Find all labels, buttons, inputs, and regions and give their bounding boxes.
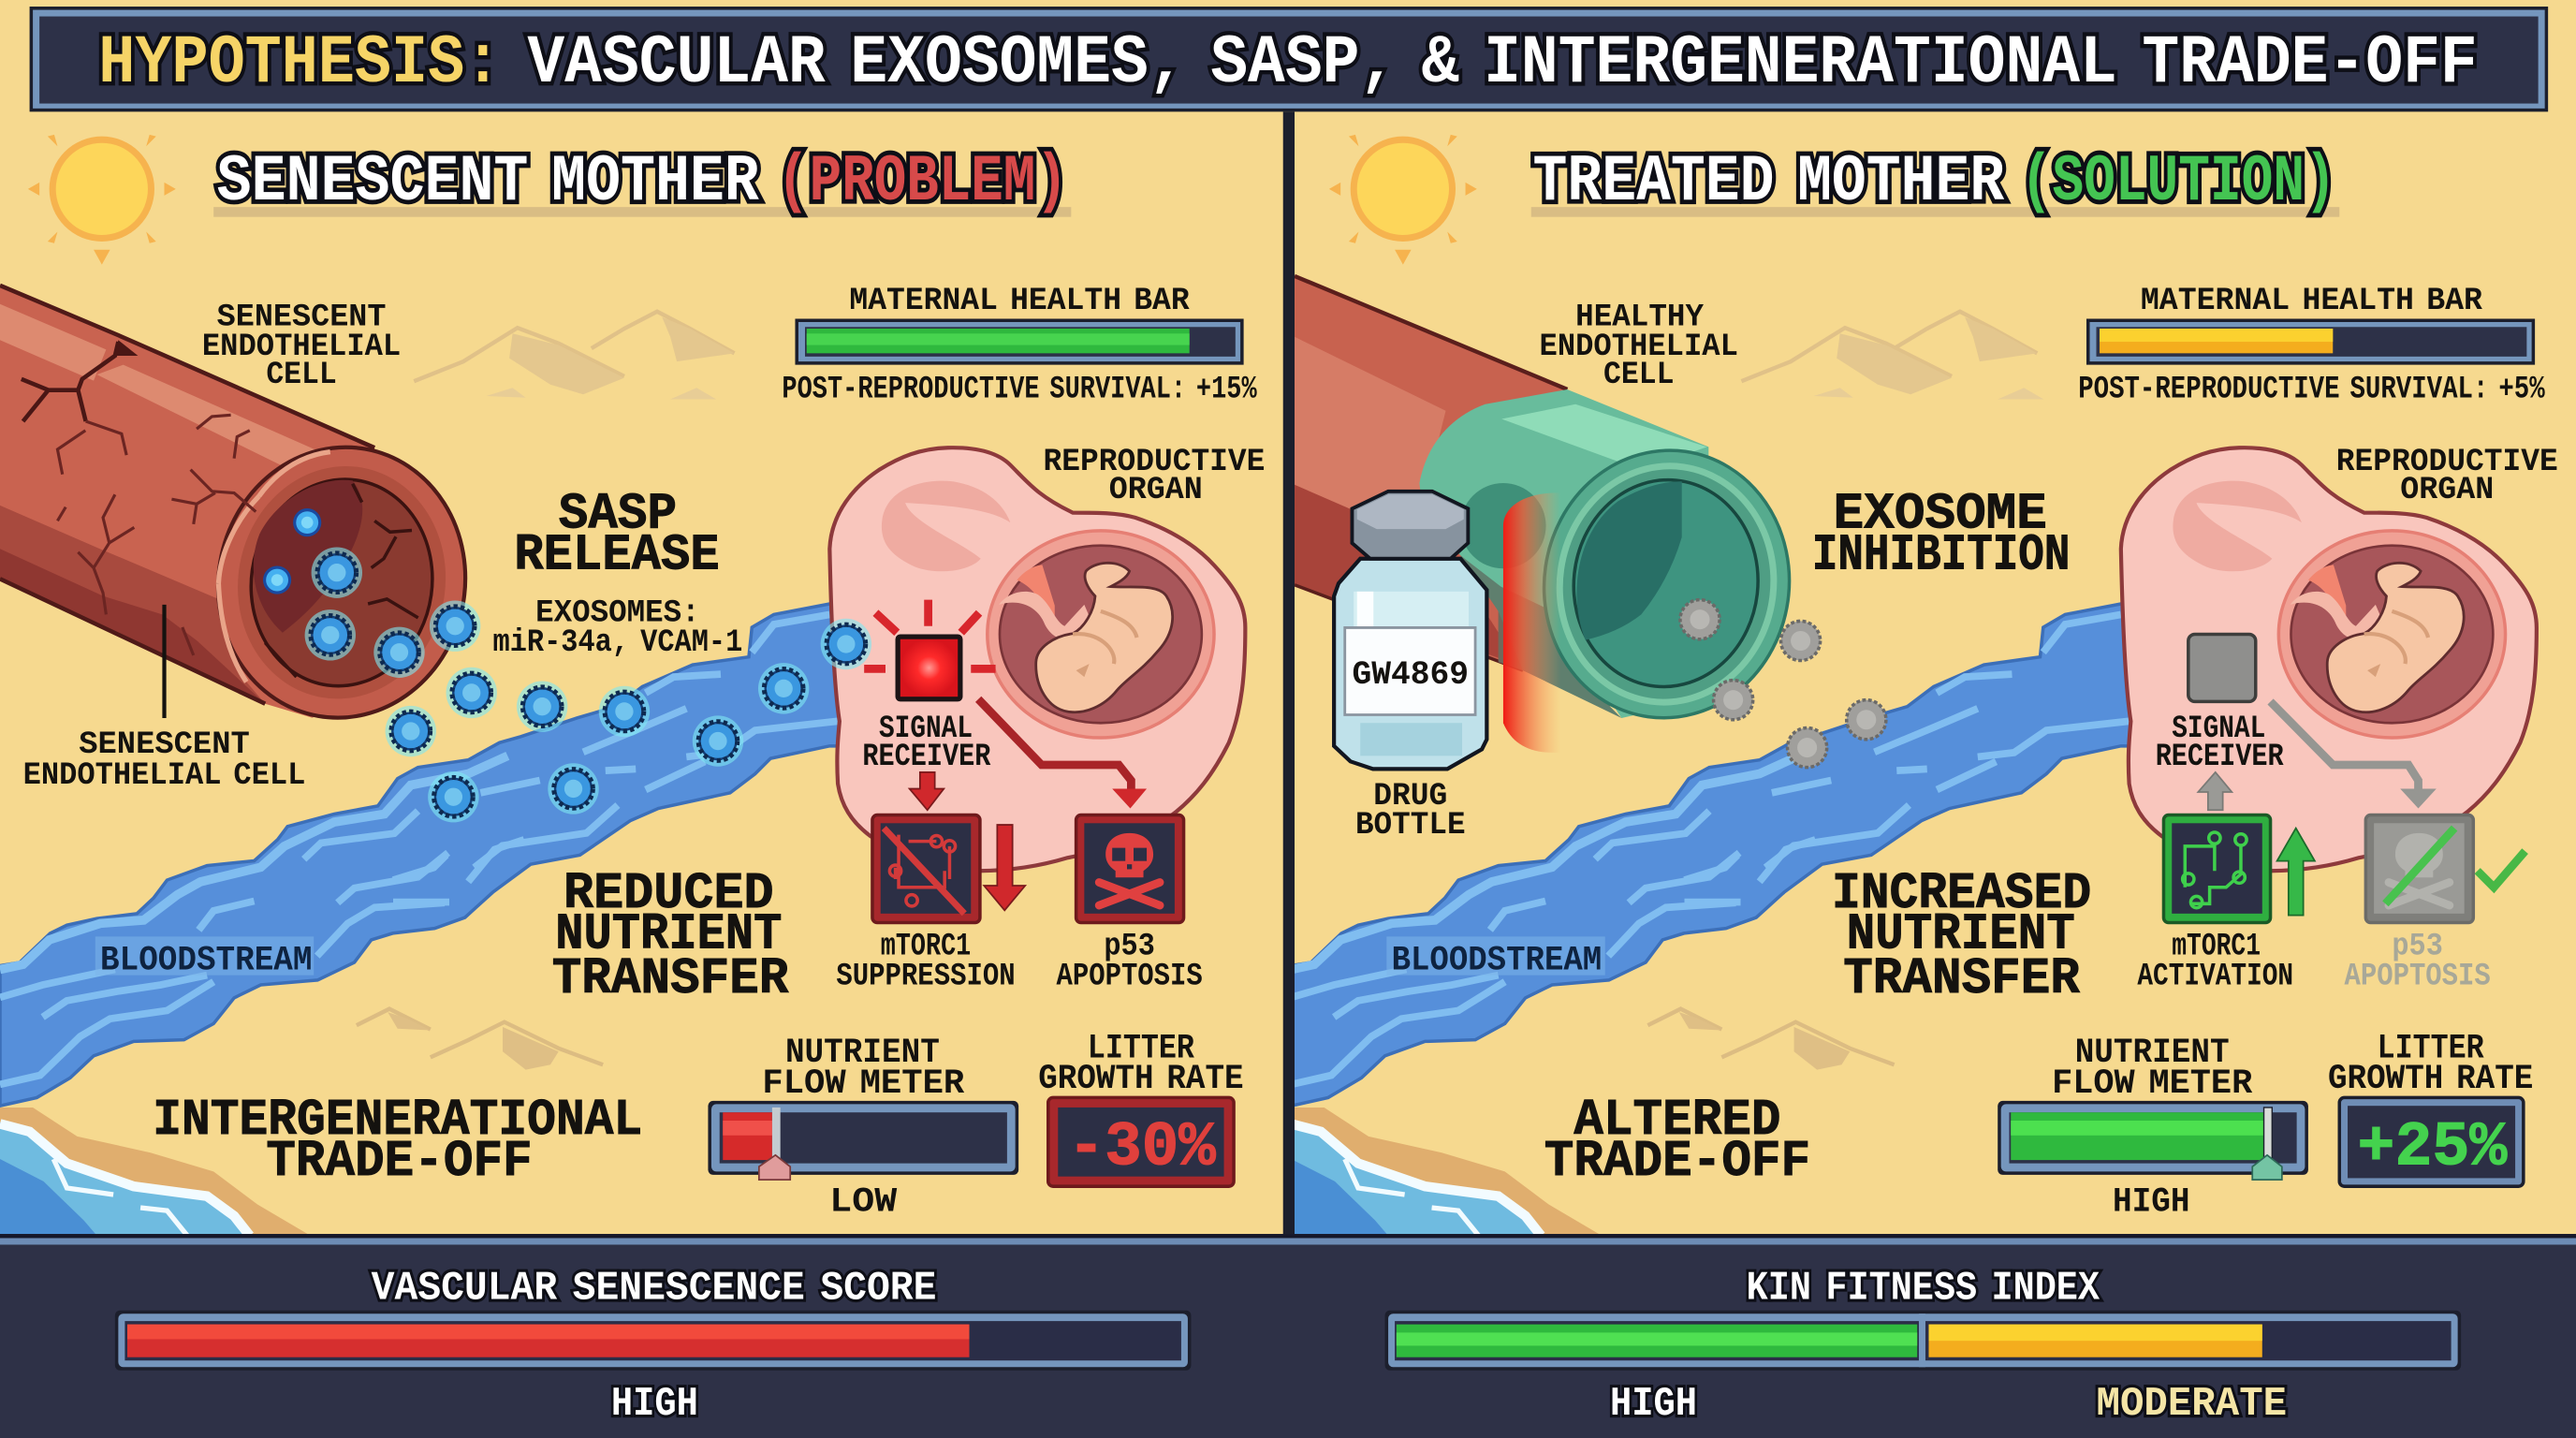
label: increased nutrient transfer: INCREASED [1832, 866, 2091, 923]
label: p53 apoptosis: p53 [1104, 930, 1155, 965]
heading underline shadow [213, 207, 1071, 217]
label: altered trade-off: TRADE-OFF [1544, 1134, 1810, 1191]
label: increased nutrient transfer [1832, 866, 2091, 1008]
label: drug bottle: DRUG [1373, 779, 1447, 814]
label: senescent endothelial cell: ENDOTHELIAL [202, 330, 401, 365]
label: reduced nutrient transfer [552, 873, 790, 993]
label: moderate: MODERATE [2097, 1381, 2287, 1428]
label: maternal health bar: MATERNAL HEALTH BAR [2141, 284, 2482, 319]
heading underline shadow [1531, 207, 2339, 217]
label: low: LOW [829, 1183, 898, 1223]
heading accent: (SOLUTION) [2021, 146, 2336, 220]
senescent blood vessel [0, 286, 487, 738]
label: intergenerational trade-off [155, 1099, 640, 1176]
red inhibition glow [1503, 493, 1560, 753]
label: mTORC1 activation: mTORC1 [2172, 930, 2261, 965]
label: mTORC1 activation: ACTIVATION [2137, 959, 2293, 994]
signal receiver off [2188, 634, 2256, 701]
label: signal receiver: RECEIVER [2156, 740, 2284, 775]
label: high: HIGH [1610, 1381, 1697, 1428]
label: healthy endothelial cell: CELL [1603, 358, 1674, 393]
dune left [1741, 328, 2043, 399]
arrow: gray up [2198, 772, 2232, 810]
reproductive organ [829, 448, 1245, 871]
label: reproductive organ: REPRODUCTIVE [1043, 445, 1265, 480]
heading: SASP release: SASP [559, 486, 677, 543]
label: mTORC1 suppression: mTORC1 [881, 930, 971, 965]
label: lower senescent endothelial cell [24, 731, 304, 785]
label: lower senescent endothelial cell: ENDOTHELIAL CELL [23, 758, 305, 794]
label: senescent endothelial cell: CELL [266, 358, 337, 393]
title banner [30, 7, 2548, 111]
label: maternal health bar: MATERNAL HEALTH BAR [849, 284, 1190, 319]
litter growth value: +25% [2358, 1112, 2508, 1183]
arrow: green up [2277, 829, 2315, 916]
nutrient flow meter [1998, 1101, 2308, 1180]
label: reproductive organ [2336, 445, 2558, 508]
arrow: gray to p53 [2271, 701, 2437, 809]
label: mTORC1 activation [2137, 930, 2293, 994]
leader line [163, 605, 166, 718]
label: litter growth rate: LITTER [1088, 1029, 1195, 1068]
label: nutrient flow meter: FLOW METER [762, 1064, 965, 1104]
label: healthy endothelial cell [1540, 301, 1738, 393]
label: bloodstream: BLOODSTREAM [1392, 942, 1602, 981]
drug label: GW4869 [1352, 656, 1469, 694]
dunes lower [357, 1009, 603, 1070]
heading: exosome inhibition [1812, 486, 2070, 584]
title highlighted word: HYPOTHESIS: [98, 25, 501, 103]
heading: SASP release [517, 492, 718, 569]
label: p53 apoptosis inactive [2345, 930, 2491, 994]
label: nutrient flow meter [765, 1039, 964, 1093]
label: bloodstream: BLOODSTREAM [100, 942, 312, 981]
green treated vessel [1419, 389, 1807, 734]
label: lower senescent endothelial cell: SENESCENT [79, 727, 250, 763]
label: reproductive organ [1045, 448, 1264, 498]
signal receiver icon [864, 600, 996, 701]
dune right [592, 312, 735, 361]
label: exosomes [494, 599, 741, 656]
arrow to p53 [978, 699, 1147, 809]
exosome at organ [821, 619, 871, 669]
maternal health bar [795, 318, 1244, 365]
label: reduced nutrient transfer: TRANSFER [552, 951, 789, 1008]
label: p53 apoptosis inactive: p53 [2392, 930, 2443, 965]
label: altered trade-off [1544, 1093, 1810, 1191]
panel: senescent mother (problem) [0, 135, 1265, 1236]
icon: p53 skull [1076, 815, 1184, 922]
label: drug bottle: BOTTLE [1355, 808, 1466, 844]
label: signal receiver: RECEIVER [862, 740, 991, 775]
label: litter growth rate [2328, 1029, 2533, 1099]
heading: exosome inhibition: INHIBITION [1812, 527, 2070, 584]
river: bloodstream [0, 604, 862, 1106]
label: intergenerational trade-off: INTERGENERATIONAL [153, 1093, 642, 1150]
sun icon [28, 135, 176, 265]
label: senescent endothelial cell: SENESCENT [217, 301, 386, 336]
label: vascular senescence score: VASCULAR SENESCENCE SCORE [372, 1265, 936, 1312]
label: signal receiver: SIGNAL [2172, 712, 2265, 747]
dunes lower [1647, 1009, 1895, 1070]
litter growth value: -30% [1068, 1112, 1217, 1183]
label: signal receiver: SIGNAL [879, 712, 973, 747]
label: p53 apoptosis [1056, 932, 1202, 985]
arrow: down [984, 825, 1025, 910]
label: reduced nutrient transfer: REDUCED [564, 866, 774, 923]
label: reduced nutrient transfer: NUTRIENT [555, 907, 782, 964]
label: litter growth rate: LITTER [2378, 1029, 2484, 1068]
litter growth value [2339, 1097, 2524, 1186]
label: senescent endothelial cell [204, 303, 399, 384]
icon: mTORC1 active [2163, 815, 2271, 922]
river: bloodstream [1292, 604, 2154, 1106]
label: litter growth rate: GROWTH RATE [1038, 1060, 1244, 1099]
sun icon [1329, 135, 1477, 265]
label: litter growth rate: GROWTH RATE [2328, 1060, 2533, 1099]
maternal health bar [2086, 318, 2535, 365]
heading: TREATED MOTHER [1533, 146, 2005, 220]
dune right [1895, 312, 2037, 361]
label: high: HIGH [611, 1381, 698, 1428]
label: post-reproductive survival: POST-REPRODUCTIVE SURVIVAL: +15% [782, 373, 1257, 408]
label: nutrient flow meter: NUTRIENT [2075, 1034, 2230, 1073]
label: altered trade-off: ALTERED [1573, 1093, 1781, 1150]
label: reproductive organ: ORGAN [2400, 473, 2494, 508]
label: p53 apoptosis: APOPTOSIS [1057, 959, 1203, 994]
label: kin fitness index: KIN FITNESS INDEX [1747, 1265, 2100, 1312]
label: litter growth rate [1039, 1034, 1243, 1088]
heading: SASP release: RELEASE [514, 527, 720, 584]
beach corner [0, 1108, 311, 1236]
label: reproductive organ: REPRODUCTIVE [2336, 445, 2558, 480]
panel: treated mother (solution) [1292, 135, 2558, 1236]
bottom score panel [0, 1234, 2576, 1438]
label: reproductive organ: ORGAN [1109, 473, 1203, 508]
check mark [2478, 851, 2525, 888]
label: exosomes: EXOSOMES: [535, 595, 700, 631]
label: healthy endothelial cell: ENDOTHELIAL [1540, 330, 1738, 365]
arrow to mTORC1 [910, 772, 944, 810]
vessel red section [1295, 276, 1610, 707]
label: exosomes: miR-34a, VCAM-1 [493, 625, 742, 661]
label: p53 apoptosis inactive: APOPTOSIS [2345, 959, 2491, 994]
label: mTORC1 suppression: SUPPRESSION [836, 959, 1016, 994]
label: healthy endothelial cell: HEALTHY [1575, 301, 1704, 336]
drug bottle [1334, 492, 1486, 769]
center divider [1283, 111, 1295, 1236]
label: nutrient flow meter: FLOW METER [2052, 1064, 2253, 1104]
reproductive organ [2121, 448, 2537, 871]
label: increased nutrient transfer: NUTRIENT [1847, 907, 2075, 964]
icon: p53 disabled [2365, 815, 2473, 922]
heading: SENESCENT MOTHER [217, 146, 760, 220]
heading accent: (PROBLEM) [777, 146, 1068, 220]
vascular senescence bar [115, 1311, 1191, 1371]
inhibited gray exosomes [1680, 600, 1886, 768]
beach corner [1292, 1108, 1602, 1236]
label: increased nutrient transfer: TRANSFER [1843, 951, 2080, 1008]
exosomes inside vessel and drifting [263, 508, 809, 822]
label: signal receiver [864, 715, 990, 766]
label: signal receiver [2156, 712, 2284, 775]
label: nutrient flow meter: NUTRIENT [785, 1034, 940, 1073]
kin fitness bar [1385, 1311, 2461, 1371]
label: nutrient flow meter [2052, 1034, 2253, 1104]
nutrient flow meter [708, 1101, 1018, 1180]
label: drug bottle [1355, 779, 1466, 844]
dune left [414, 328, 716, 399]
label: mTORC1 suppression [837, 932, 1014, 985]
icon: mTORC1 suppressed [872, 815, 980, 922]
litter growth value [1048, 1097, 1234, 1186]
heading: exosome inhibition: EXOSOME [1834, 486, 2047, 543]
label: high: HIGH [2113, 1183, 2190, 1223]
label: intergenerational trade-off: TRADE-OFF [266, 1134, 533, 1191]
